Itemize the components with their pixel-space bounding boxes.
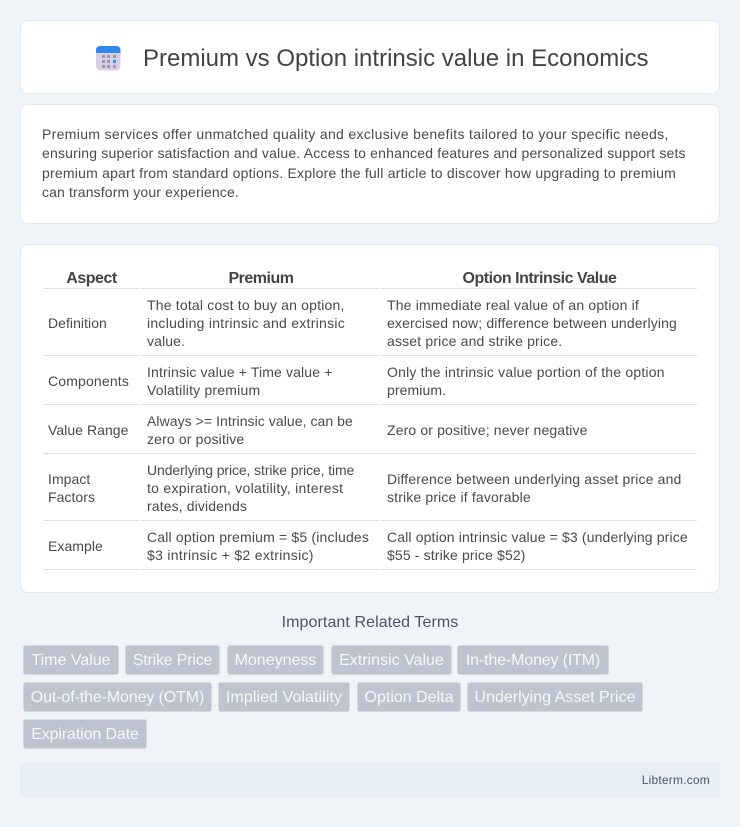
comparison table <box>43 270 697 570</box>
related term tags: Expiration Date <box>31 726 139 743</box>
icon: calendar <box>96 46 120 70</box>
panel: intro <box>20 104 720 224</box>
related term tags: Strike Price <box>133 652 212 669</box>
row: impact factors: Impact <box>48 471 90 487</box>
related term tags: Underlying Asset Price <box>475 689 635 706</box>
panel: header <box>20 20 720 94</box>
row: impact factors: rates, dividends <box>147 498 247 514</box>
related term tags: In-the-Money (ITM) <box>466 652 600 669</box>
panel: comparison table <box>20 244 720 593</box>
row: components: Volatility premium <box>147 382 260 398</box>
title: Premium vs Option intrinsic value in Economics <box>143 45 649 72</box>
table header <box>66 270 616 287</box>
related term tags: Time Value <box>31 652 111 669</box>
row: components: Components <box>48 373 129 389</box>
row: components: Intrinsic value + Time value + <box>147 364 333 380</box>
row: value range: Value Range <box>48 422 128 438</box>
row: components: Only the intrinsic value portion of the option <box>387 364 665 380</box>
row: example <box>48 529 688 563</box>
row: components: premium. <box>387 382 446 398</box>
intro text <box>42 126 686 200</box>
related term tags <box>23 645 643 749</box>
related term tags: Implied Volatility <box>226 689 342 706</box>
heading: related terms: Important Related Terms <box>282 614 458 631</box>
related term tags: Extrinsic Value <box>339 652 444 669</box>
intro text: Premium services offer unmatched quality and exclusive benefits tailored to your specific needs, <box>42 126 669 142</box>
row: example: $55 - strike price $52) <box>387 547 526 563</box>
row: definition: exercised now; difference between underlying <box>387 315 677 331</box>
row: impact factors: to expiration, volatility, interest <box>147 480 343 496</box>
row: value range: Zero or positive; never negative <box>387 422 588 438</box>
row: impact factors <box>48 462 681 514</box>
row: impact factors: strike price if favorable <box>387 489 531 505</box>
table header: Aspect <box>66 270 117 287</box>
row: example: Example <box>48 538 103 554</box>
row: definition: The immediate real value of an option if <box>387 297 639 313</box>
row: value range: Always >= Intrinsic value, can be <box>147 413 353 429</box>
row: example: Call option premium = $5 (includes <box>147 529 369 545</box>
row: value range <box>48 413 588 447</box>
row: definition <box>48 297 677 349</box>
row: value range: zero or positive <box>147 431 244 447</box>
intro text: can transform your experience. <box>42 184 239 200</box>
related term tags: Out-of-the-Money (OTM) <box>31 689 204 706</box>
row: components <box>48 364 665 398</box>
table header: Premium <box>228 270 294 287</box>
row: example: $3 intrinsic + $2 extrinsic) <box>147 547 314 563</box>
row: impact factors: Underlying price, strike price, time <box>147 462 354 478</box>
row: example: Call option intrinsic value = $3 (underlying price <box>387 529 688 545</box>
footer credit: Libterm.com <box>642 773 710 787</box>
related term tags: Option Delta <box>365 689 453 706</box>
row: definition: value. <box>147 333 185 349</box>
intro text: premium apart from standard options. Explore the full article to discover how upgrading to premium <box>42 165 676 181</box>
row: definition: The total cost to buy an option, <box>147 297 345 313</box>
row: definition: asset price and strike price. <box>387 333 562 349</box>
related term tags: Moneyness <box>235 652 316 669</box>
footer <box>20 763 720 797</box>
row: definition: including intrinsic and extrinsic <box>147 315 345 331</box>
row: definition: Definition <box>48 315 107 331</box>
row: impact factors: Difference between underlying asset price and <box>387 471 681 487</box>
table header: Option Intrinsic Value <box>463 270 616 287</box>
intro text: ensuring superior satisfaction and value. Access to enhanced features and personalized support sets <box>42 145 686 161</box>
row: impact factors: Factors <box>48 489 95 505</box>
